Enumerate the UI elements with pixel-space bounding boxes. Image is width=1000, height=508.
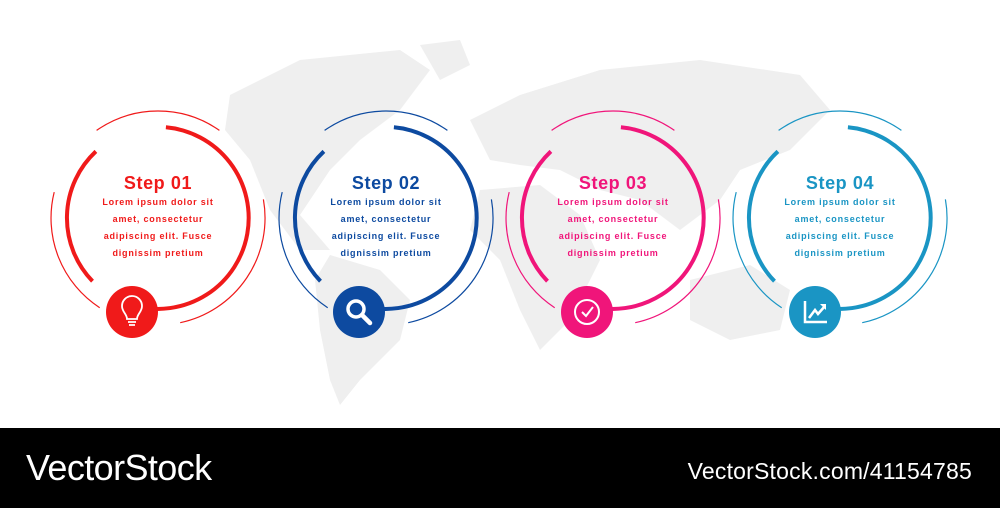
step 1 text: Step 01 (124, 173, 192, 193)
world map background (225, 40, 830, 405)
icon: chart (789, 286, 841, 338)
footer bar (0, 428, 1000, 508)
step 3 (506, 111, 720, 323)
icon: clock (561, 286, 613, 338)
step 3 text: adipiscing elit. Fusce (559, 231, 667, 241)
step 1 text: dignissim pretium (112, 248, 204, 258)
icon: lightbulb (106, 286, 158, 338)
step 4 text: amet, consectetur (795, 214, 885, 224)
step 4 text (784, 173, 896, 258)
step 2 text: Lorem ipsum dolor sit (330, 197, 442, 207)
step 4 text: Step 04 (806, 173, 874, 193)
step 4 text: dignissim pretium (794, 248, 886, 258)
step 1 text: adipiscing elit. Fusce (104, 231, 212, 241)
footer bar: VectorStock (26, 447, 213, 488)
step 2 text: dignissim pretium (340, 248, 432, 258)
step 2 (279, 111, 493, 323)
step 3 text: amet, consectetur (568, 214, 658, 224)
step 2 text (330, 173, 442, 258)
step 3 text: Step 03 (579, 173, 647, 193)
step 4 text: adipiscing elit. Fusce (786, 231, 894, 241)
step 3 text (557, 173, 669, 258)
step 1 text: Lorem ipsum dolor sit (102, 197, 214, 207)
step 1 text (102, 173, 214, 258)
step 3 text: Lorem ipsum dolor sit (557, 197, 669, 207)
footer bar: VectorStock.com/41154785 (688, 458, 972, 484)
step 2 text: Step 02 (352, 173, 420, 193)
step 4 text: Lorem ipsum dolor sit (784, 197, 896, 207)
step 1 text: amet, consectetur (113, 214, 203, 224)
step 2 text: adipiscing elit. Fusce (332, 231, 440, 241)
icon: magnifier (333, 286, 385, 338)
step 3 text: dignissim pretium (567, 248, 659, 258)
step 1 (51, 111, 265, 323)
step 4 (733, 111, 947, 323)
step 2 text: amet, consectetur (341, 214, 431, 224)
